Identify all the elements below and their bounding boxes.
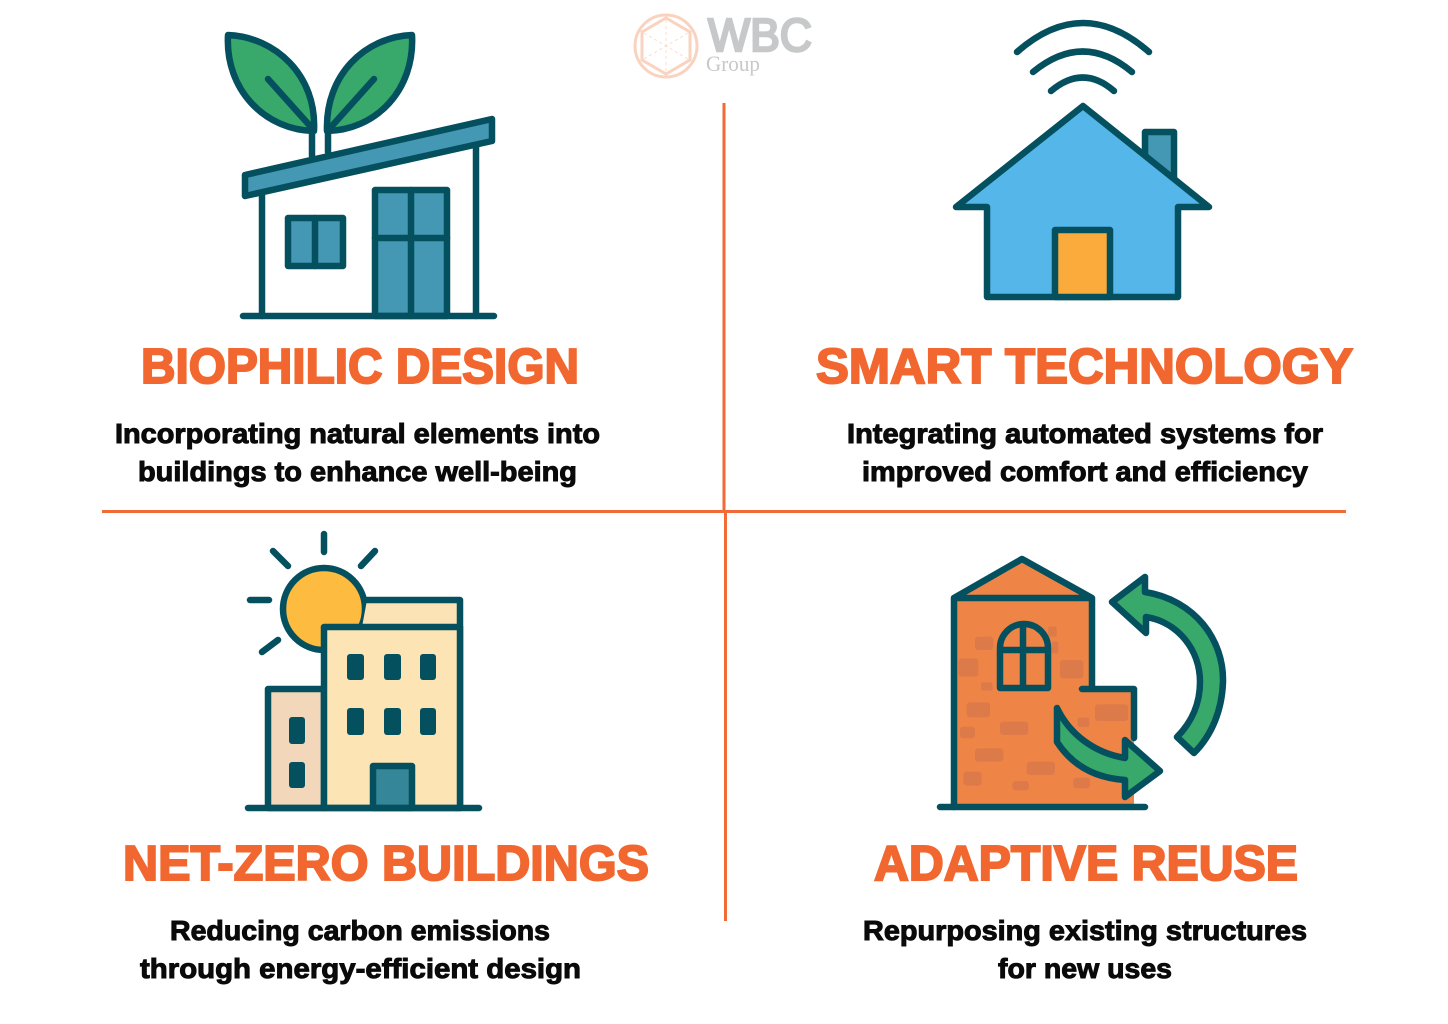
description: net-zero buildings: Reducing carbon emissions bbox=[170, 915, 550, 946]
divider lines bbox=[102, 103, 1346, 921]
description: smart technology: improved comfort and efficiency bbox=[862, 456, 1308, 487]
panel: biophilic design bbox=[115, 35, 600, 487]
icon: building windows bbox=[289, 654, 436, 788]
heading: net-zero buildings: NET-ZERO BUILDINGS bbox=[123, 837, 649, 891]
description: adaptive reuse bbox=[863, 915, 1307, 984]
icon: smart home with wifi bbox=[956, 23, 1209, 297]
heading: biophilic design: BIOPHILIC DESIGN bbox=[141, 340, 579, 394]
description: smart technology bbox=[847, 418, 1323, 487]
logo: WBC Group bbox=[635, 9, 812, 77]
icon: sun and buildings bbox=[248, 534, 479, 808]
description: adaptive reuse: for new uses bbox=[998, 953, 1172, 984]
description: net-zero buildings: through energy-efficient design bbox=[140, 953, 581, 984]
description: adaptive reuse: Repurposing existing structures bbox=[863, 915, 1307, 946]
panel: adaptive reuse bbox=[863, 559, 1307, 984]
heading: adaptive reuse: ADAPTIVE REUSE bbox=[874, 837, 1298, 891]
description: biophilic design bbox=[115, 418, 600, 487]
description: biophilic design: Incorporating natural elements into bbox=[115, 418, 600, 449]
description: smart technology: Integrating automated systems for bbox=[847, 418, 1323, 449]
description: biophilic design: buildings to enhance well-being bbox=[138, 456, 577, 487]
logo: WBC Group: WBC bbox=[708, 9, 812, 61]
icon: house with leaves bbox=[228, 35, 494, 316]
heading: smart technology: SMART TECHNOLOGY bbox=[816, 340, 1353, 394]
logo: WBC Group: Group bbox=[706, 51, 760, 76]
description: net-zero buildings bbox=[140, 915, 581, 984]
panel: smart technology bbox=[816, 23, 1353, 487]
panel: net-zero buildings bbox=[123, 534, 649, 984]
icon: brick building with recycling arrows bbox=[940, 559, 1223, 807]
